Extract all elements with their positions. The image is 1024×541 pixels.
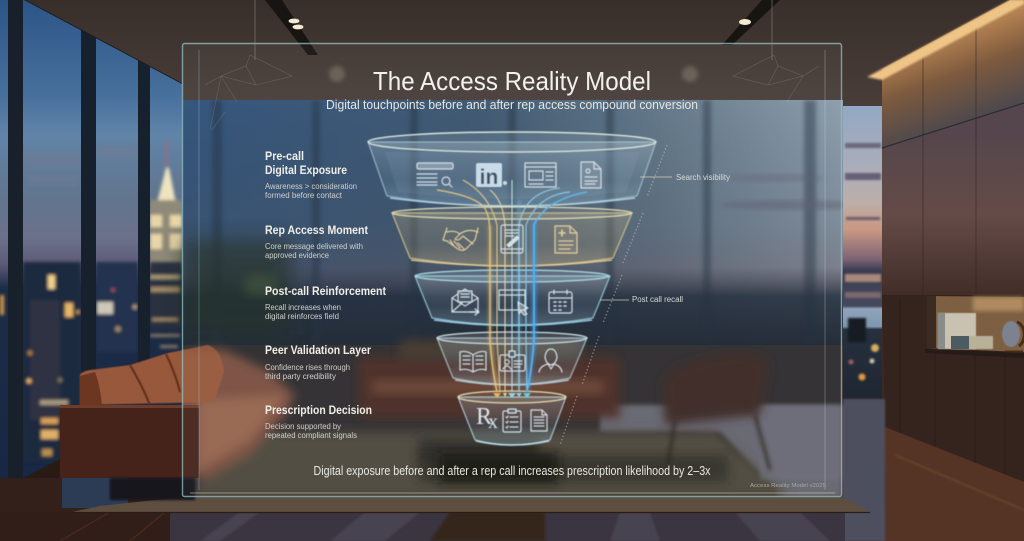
ceiling light tracks: [265, 0, 780, 82]
icon: LinkedIn: in: [480, 166, 498, 189]
tier 5 vessel: [458, 391, 566, 445]
icon: browser cursor: [499, 290, 528, 315]
icon: clipboard: [503, 409, 521, 432]
label: post-call reinforcement: Recall increases when: [265, 303, 341, 312]
icon: tablet: [501, 225, 523, 253]
tier 3 icons: [452, 289, 572, 315]
label: pre-call digital exposure: [265, 151, 381, 200]
tier 1 icons: [417, 162, 601, 189]
callout: search visibility: [640, 173, 730, 182]
label: pre-call digital exposure: Awareness > consideration: [265, 182, 357, 191]
funnel: [368, 132, 656, 445]
tier 4 vessel: [437, 332, 587, 385]
icon: medical document: [555, 226, 577, 253]
label: rep access moment: approved evidence: [265, 251, 330, 260]
tier 3 vessel: [415, 270, 610, 326]
icon: ID badge: [500, 351, 525, 371]
converging flow lines: [437, 180, 587, 392]
label: rep access moment: Core message delivered with: [265, 242, 363, 251]
floor: [0, 399, 1024, 541]
icon: handshake: [443, 228, 478, 250]
icon: search results: [417, 163, 453, 187]
label: post-call reinforcement: digital reinforces field: [265, 312, 339, 321]
subtitle: Digital touchpoints before and after rep access compound conversion: [326, 98, 698, 112]
title: The Access Reality Model: [373, 66, 651, 96]
label: rep access moment: [265, 225, 400, 260]
icon: LinkedIn: [476, 163, 507, 189]
label: pre-call digital exposure: Pre-call: [265, 151, 304, 163]
callout: post call recall: [600, 295, 683, 304]
icon: open book: [460, 351, 486, 372]
wood wall and cabinet: [882, 0, 1024, 482]
tier 2 icons: [443, 225, 577, 253]
central window wall, blurred by glass: [182, 100, 860, 345]
label: post-call reinforcement: [265, 286, 424, 321]
label: peer validation layer: Peer Validation Layer: [265, 345, 371, 357]
version footnote: Access Reality Model v2025: [750, 483, 826, 489]
icon: person: [539, 349, 562, 372]
couch: [60, 345, 295, 500]
left window skyline: [0, 0, 190, 510]
label: rep access moment: Rep Access Moment: [265, 225, 368, 237]
label: post-call reinforcement: Post-call Reinforcement: [265, 286, 386, 298]
tier 2 vessel: [392, 207, 632, 266]
tier 4 icons: [460, 349, 562, 372]
callout: post call recall: Post call recall: [632, 295, 683, 304]
icon: calendar: [549, 290, 572, 313]
cove light: [867, 0, 1024, 80]
label: prescription decision: repeated compliant signals: [265, 431, 357, 440]
tier 1 vessel: [368, 132, 656, 206]
right window: [843, 106, 882, 399]
panel: glass board: [182, 0, 842, 497]
flow arrowheads: [493, 393, 531, 398]
rug edge: [72, 497, 870, 512]
label: pre-call digital exposure: formed before contact: [265, 191, 343, 200]
label: peer validation layer: Confidence rises through: [265, 363, 350, 372]
icon: web page: [525, 163, 556, 187]
key takeaway: Digital exposure before and after a rep call increases prescription likelihood by 2–3x: [314, 464, 711, 478]
icon: email: [452, 289, 479, 315]
icon: Rx symbol: R: [476, 404, 492, 430]
label: prescription decision: Prescription Decision: [265, 405, 372, 417]
side tick marks: [560, 145, 667, 445]
icon: document: [581, 162, 601, 188]
callout: search visibility: Search visibility: [676, 173, 730, 182]
floor behind glass: [182, 345, 842, 497]
ceiling: [26, 0, 1010, 106]
label: pre-call digital exposure: Digital Exposure: [265, 165, 347, 177]
tier 5 icons: [476, 404, 547, 433]
icon: report page: [531, 410, 547, 431]
label: prescription decision: [265, 405, 466, 440]
label: prescription decision: Decision supported by: [265, 422, 341, 431]
icon: Rx symbol: x: [488, 411, 498, 433]
label: peer validation layer: third party credibility: [265, 372, 336, 381]
label: peer validation layer: [265, 345, 445, 381]
blurred furniture behind the glass: [182, 240, 770, 483]
